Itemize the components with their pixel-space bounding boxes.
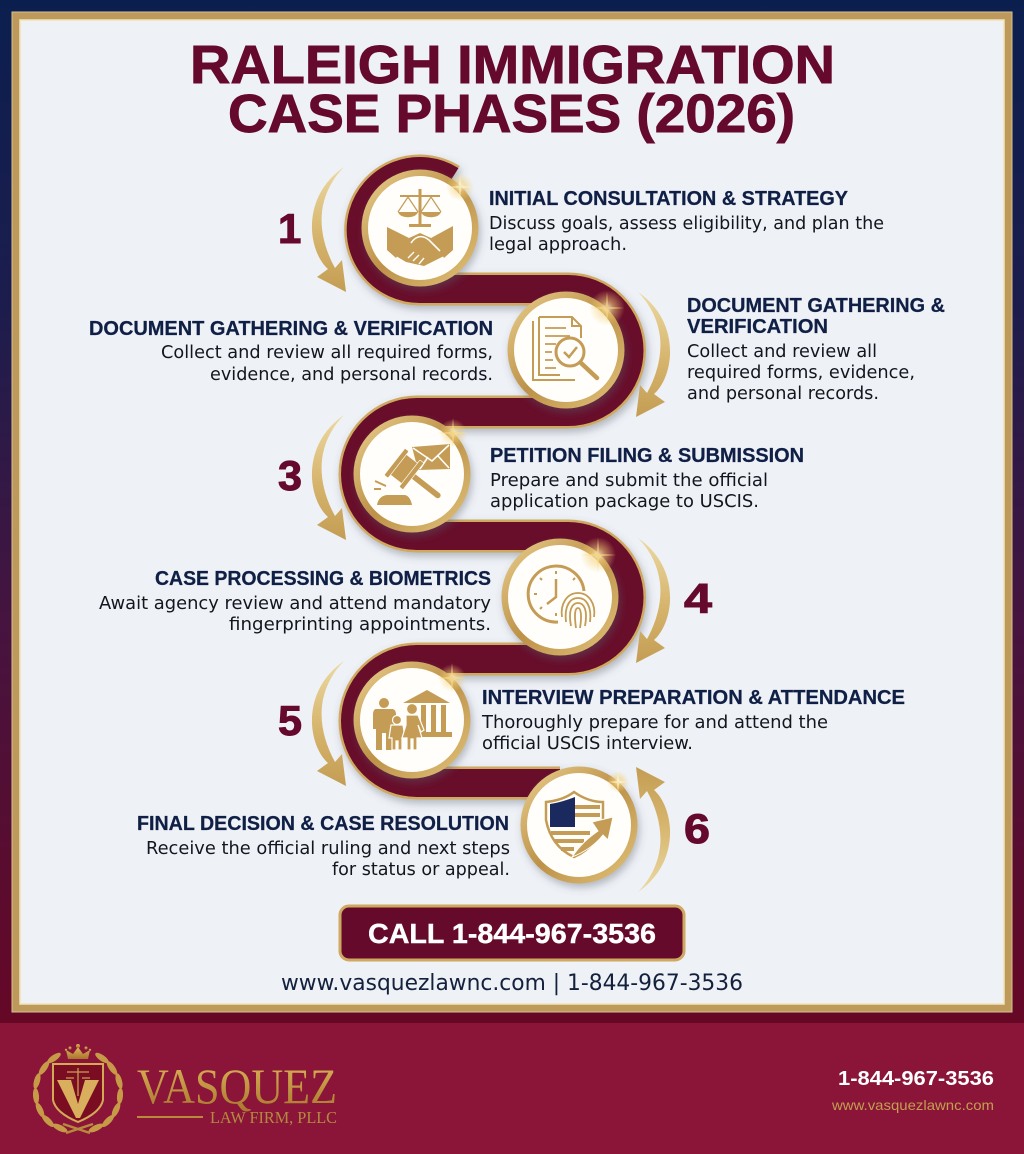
step 6 text: FINAL DECISION & CASE RESOLUTION <box>137 813 509 835</box>
badge 2: documents and magnifier <box>508 292 624 408</box>
badge 3: gavel and envelope <box>354 416 470 532</box>
number 3: 3 <box>278 452 302 499</box>
step 1 text: Discuss goals, assess eligibility, and plan the <box>489 213 884 234</box>
footer contact: 1-844-967-3536 <box>838 1067 994 1090</box>
call button <box>340 906 684 960</box>
arrow 5 <box>312 661 346 786</box>
step 5 text: official USCIS interview. <box>482 733 693 754</box>
step 1 text: legal approach. <box>489 234 627 255</box>
step 6 text: Receive the official ruling and next steps <box>146 838 510 859</box>
step 6 text: for status or appeal. <box>332 859 510 880</box>
number 6: 6 <box>684 805 710 852</box>
badge 4: clock and fingerprint <box>502 538 618 656</box>
step 2 right text: Collect and review all <box>687 341 877 362</box>
step 2 right text: VERIFICATION <box>687 316 828 338</box>
arrow 2 <box>636 292 670 417</box>
step 4 text: Await agency review and attend mandatory <box>99 593 491 614</box>
badge 1: scales and handshake <box>362 170 478 286</box>
step 5 text: Thoroughly prepare for and attend the <box>481 712 828 733</box>
step 1 text: INITIAL CONSULTATION & STRATEGY <box>489 188 849 210</box>
step 4 text: fingerprinting appointments. <box>229 614 491 635</box>
step 6 text <box>137 813 510 880</box>
sparkles <box>437 173 629 793</box>
website and phone line: www.vasquezlawnc.com | 1-844-967-3536 <box>281 971 743 996</box>
badge 5: family and courthouse <box>354 662 470 778</box>
crown <box>65 1044 91 1059</box>
arrow 6 <box>636 767 670 892</box>
step 5 text <box>481 687 905 754</box>
shield <box>53 1064 103 1122</box>
step 2 right text: required forms, evidence, <box>687 362 915 383</box>
step 4 text <box>99 568 491 635</box>
step 1 text <box>489 188 884 255</box>
number 1: 1 <box>278 205 301 252</box>
title: RALEIGH IMMIGRATION <box>190 35 835 95</box>
step 2 left text <box>89 318 493 385</box>
footer contact: www.vasquezlawnc.com <box>831 1097 994 1113</box>
title: CASE PHASES (2026) <box>228 84 795 144</box>
step 3 text: application package to USCIS. <box>490 491 759 512</box>
step 5 text: INTERVIEW PREPARATION & ATTENDANCE <box>482 687 905 709</box>
title <box>190 35 835 144</box>
step 2 right text <box>687 295 945 404</box>
step 2 left text: Collect and review all required forms, <box>161 342 493 363</box>
step 2 right text: DOCUMENT GATHERING & <box>687 295 945 317</box>
arrow 3 <box>312 415 346 540</box>
step 2 left text: DOCUMENT GATHERING & VERIFICATION <box>89 318 493 340</box>
logo emblem <box>32 1044 124 1134</box>
step 2 right text: and personal records. <box>687 383 879 404</box>
arrow 1 <box>312 167 346 292</box>
logo wordmark: VASQUEZ <box>137 1058 337 1114</box>
number 4: 4 <box>684 575 713 622</box>
step 3 text: Prepare and submit the official <box>490 470 768 491</box>
number 5: 5 <box>278 697 302 744</box>
step 3 text: PETITION FILING & SUBMISSION <box>490 445 804 467</box>
laurel wreath <box>32 1051 124 1134</box>
footer band <box>0 1023 1024 1154</box>
serpentine ribbon <box>355 171 630 783</box>
step 2 left text: evidence, and personal records. <box>210 364 493 385</box>
step 3 text <box>490 445 804 512</box>
logo wordmark: LAW FIRM, PLLC <box>210 1108 337 1127</box>
arrow 4 <box>636 538 670 663</box>
step 4 text: CASE PROCESSING & BIOMETRICS <box>155 568 491 590</box>
call button: CALL 1-844-967-3536 <box>368 918 656 949</box>
badge 6: shield with upward arrow <box>520 766 638 884</box>
footer contact <box>831 1067 994 1113</box>
